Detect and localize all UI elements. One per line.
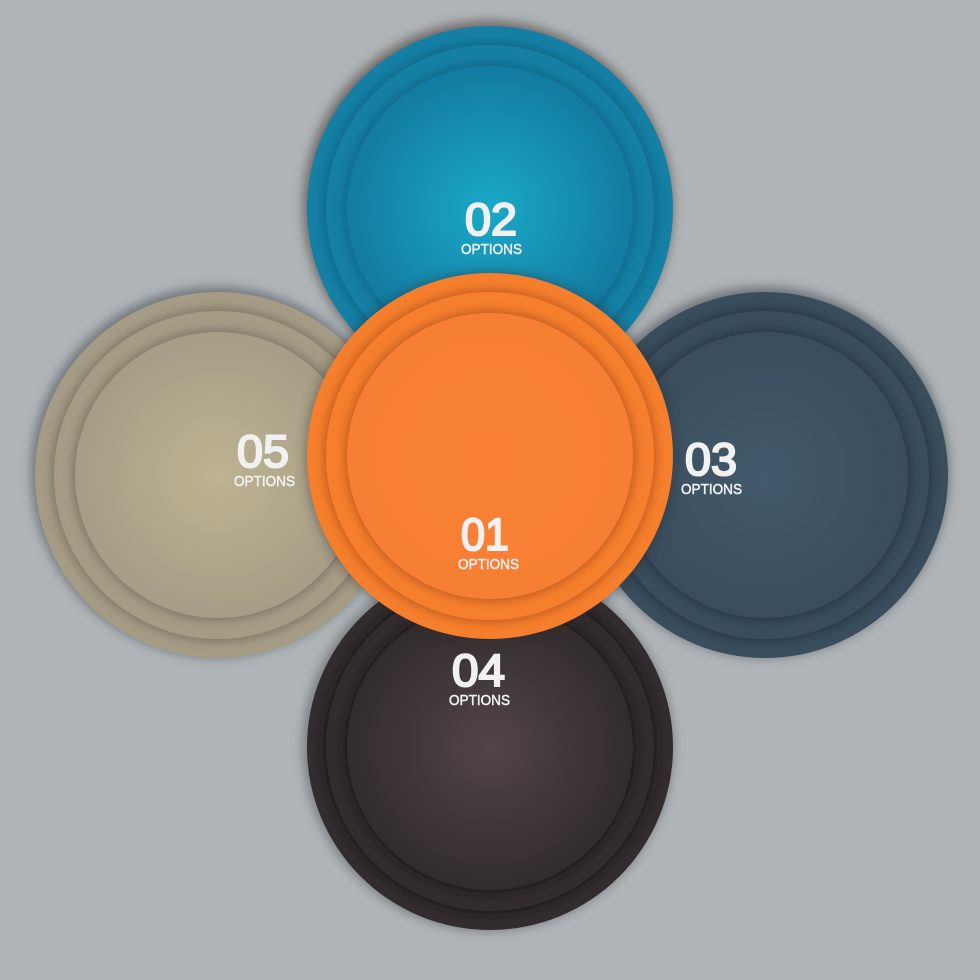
label: 03 options [681, 434, 742, 498]
panel: option 03 slate circle [579, 287, 949, 658]
panel: option 01 orange centre circle [305, 271, 675, 641]
label: 04 options [449, 645, 510, 709]
label: 02 options: 02 [465, 194, 517, 245]
label: 01 options: 01 [461, 509, 509, 560]
label: 02 options [461, 194, 522, 258]
panel: option 04 dark brown circle [303, 561, 673, 931]
panel: option 05 tan circle [31, 287, 401, 658]
label: 02 options: OPTIONS [461, 242, 522, 258]
label: 03 options: OPTIONS [681, 482, 742, 498]
label: 04 options: OPTIONS [449, 693, 510, 709]
label: 01 options [458, 509, 519, 573]
panel: option 02 blue circle [303, 21, 673, 392]
label: 01 options: OPTIONS [458, 557, 519, 573]
label: 03 options: 03 [685, 434, 737, 485]
label: 05 options [234, 426, 295, 490]
label: 04 options: 04 [452, 645, 505, 696]
label: 05 options: 05 [237, 426, 289, 477]
label: 05 options: OPTIONS [234, 474, 295, 490]
